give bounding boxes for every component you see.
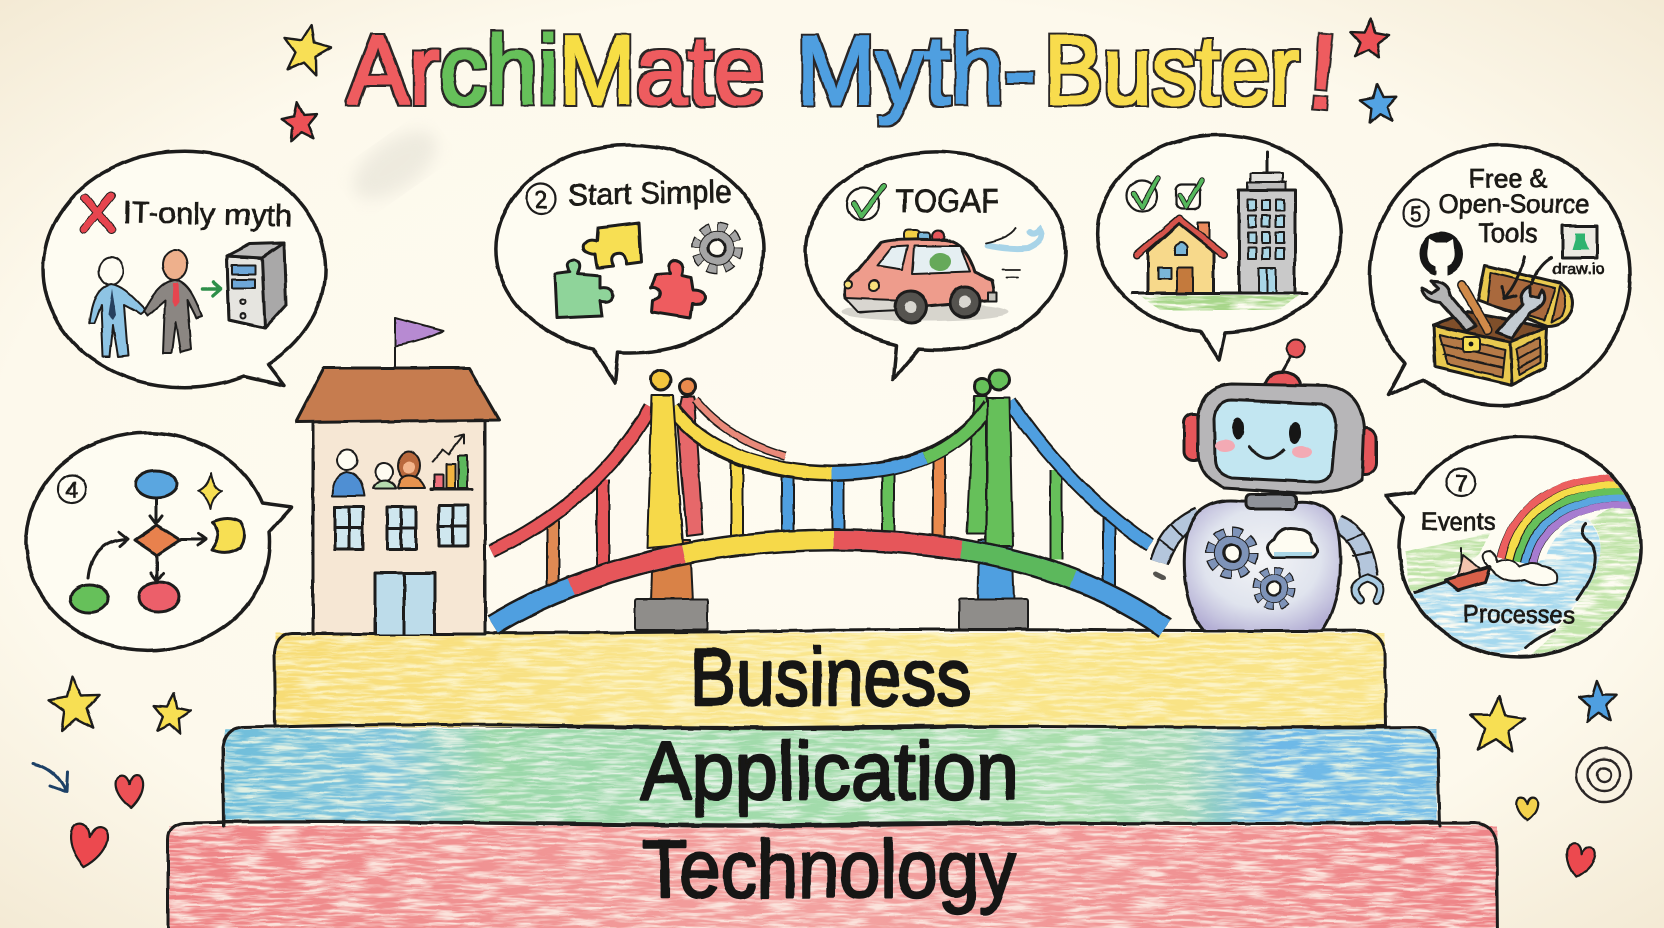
large heart <box>66 822 110 870</box>
number 4 <box>58 475 86 503</box>
yellow puzzle piece <box>584 223 641 268</box>
building wall <box>313 418 485 634</box>
house <box>1137 219 1224 293</box>
layer: Business: Business <box>690 632 971 723</box>
draw.io label: draw.io <box>1552 261 1605 278</box>
speech bubble: IT-only myth <box>43 151 325 387</box>
bridge lower pillars and bases <box>635 540 1028 630</box>
bridge front towers <box>647 370 1013 548</box>
label: Tools <box>1478 218 1538 248</box>
decorative stars around title <box>278 17 1399 142</box>
speech bubble: Free & Open-Source Tools <box>1370 145 1630 405</box>
bridge <box>492 370 1165 630</box>
skyscraper <box>1239 152 1295 293</box>
speech bubble: TOGAF <box>806 152 1066 380</box>
yellow star <box>46 674 103 732</box>
green node <box>70 585 108 613</box>
server <box>227 243 286 328</box>
icon: GitHub <box>1419 232 1463 280</box>
green arrow <box>202 282 221 296</box>
sparkle <box>198 473 222 509</box>
foam <box>1483 551 1557 585</box>
red heart <box>1563 842 1597 880</box>
ground line <box>1132 292 1307 294</box>
chest lock <box>1463 337 1480 352</box>
bottom-left doodles <box>33 674 193 870</box>
label: Free & <box>1469 163 1547 193</box>
building windows <box>335 505 468 549</box>
building flag <box>395 318 443 368</box>
bridge hangers <box>553 455 1109 590</box>
building people and chart window <box>332 435 472 496</box>
robot head <box>1198 384 1364 493</box>
two people shaking hands <box>89 250 202 357</box>
green puzzle piece <box>555 260 613 318</box>
chest lid <box>1478 265 1573 326</box>
bridge cables <box>492 400 1150 551</box>
wind and speed lines <box>986 228 1042 278</box>
robot body <box>1184 500 1340 631</box>
number 2 <box>526 184 556 214</box>
number 5: 5 <box>1410 203 1422 226</box>
robot neck <box>1246 494 1296 509</box>
diamond gateway <box>135 525 180 555</box>
left wrench <box>1422 281 1476 331</box>
label: Open-Source <box>1439 189 1590 219</box>
label: IT-only myth <box>122 196 293 233</box>
target rings <box>1577 748 1631 802</box>
label: TOGAF <box>896 182 999 219</box>
robot screen and face <box>1214 400 1336 482</box>
yellow heart <box>1516 798 1538 821</box>
robot arms <box>1156 516 1381 601</box>
bridge rear tower posts <box>677 379 990 536</box>
title: ArchiMate Myth-Buster!: Myth- <box>796 15 1036 125</box>
title: ArchiMate Myth-Buster!: ArchiMate <box>347 15 765 125</box>
label <box>1439 163 1590 248</box>
green checks <box>1127 178 1202 211</box>
layer: Application: Application <box>640 726 1019 817</box>
chest front <box>1433 325 1512 385</box>
number 7 <box>1447 468 1475 496</box>
building <box>296 318 499 634</box>
land and river outlines <box>1415 523 1595 648</box>
flow arrows <box>88 499 206 581</box>
blue start event <box>135 470 177 498</box>
paint brush <box>1462 285 1488 330</box>
title: ArchiMate Myth-Buster!: Buster <box>1044 15 1299 125</box>
treasure chest with tools <box>1422 265 1573 385</box>
speech bubble: Start Simple <box>496 145 764 383</box>
smudge mark <box>342 118 448 212</box>
speech bubble: process diagram <box>26 433 292 651</box>
label: Start Simple <box>568 174 732 212</box>
label: Processes: Processes <box>1463 600 1575 630</box>
layer: Technology <box>168 822 1498 928</box>
speech bubble: house and skyscraper <box>1097 135 1341 360</box>
number 5 <box>1403 200 1429 226</box>
landscape colour patches <box>1406 504 1640 654</box>
number 4: 4 <box>66 477 78 502</box>
bottom-right doodles <box>1468 680 1631 880</box>
icon: draw.io <box>1562 226 1597 258</box>
rainbow <box>1497 475 1640 565</box>
blue star <box>1578 680 1618 722</box>
building roof <box>296 368 499 422</box>
grey gear <box>698 228 736 268</box>
robot <box>1156 339 1381 631</box>
green check <box>847 186 884 220</box>
layer: Application <box>223 726 1440 826</box>
red cross <box>84 196 112 230</box>
curved blue arrow <box>33 763 68 792</box>
layer: Business <box>274 629 1386 728</box>
building door <box>375 573 435 634</box>
number 2: 2 <box>534 187 548 214</box>
racing car <box>841 230 1009 323</box>
arrows into chest <box>1502 257 1551 299</box>
boat <box>1445 548 1490 590</box>
layer: Technology: Technology <box>642 824 1016 915</box>
number 7: 7 <box>1455 470 1467 496</box>
red node <box>139 582 179 612</box>
title: ArchiMate Myth-Buster! <box>347 12 1342 132</box>
robot ears <box>1184 414 1376 474</box>
small heart <box>115 775 145 809</box>
robot gears and cloud <box>1212 528 1318 604</box>
speech bubble: Events and Processes <box>1386 437 1650 660</box>
red puzzle piece <box>651 260 705 318</box>
yellow star <box>1468 694 1527 752</box>
chest opening <box>1433 312 1547 342</box>
small yellow star <box>150 691 193 735</box>
right wrench <box>1497 286 1544 338</box>
grass <box>1140 295 1299 310</box>
title: ArchiMate Myth-Buster!: ! <box>1303 12 1342 132</box>
label: Events: Events <box>1421 508 1496 536</box>
robot antenna <box>1264 339 1305 386</box>
bridge deck arch <box>493 540 1165 628</box>
moon <box>212 518 244 552</box>
layer stack <box>168 629 1498 928</box>
